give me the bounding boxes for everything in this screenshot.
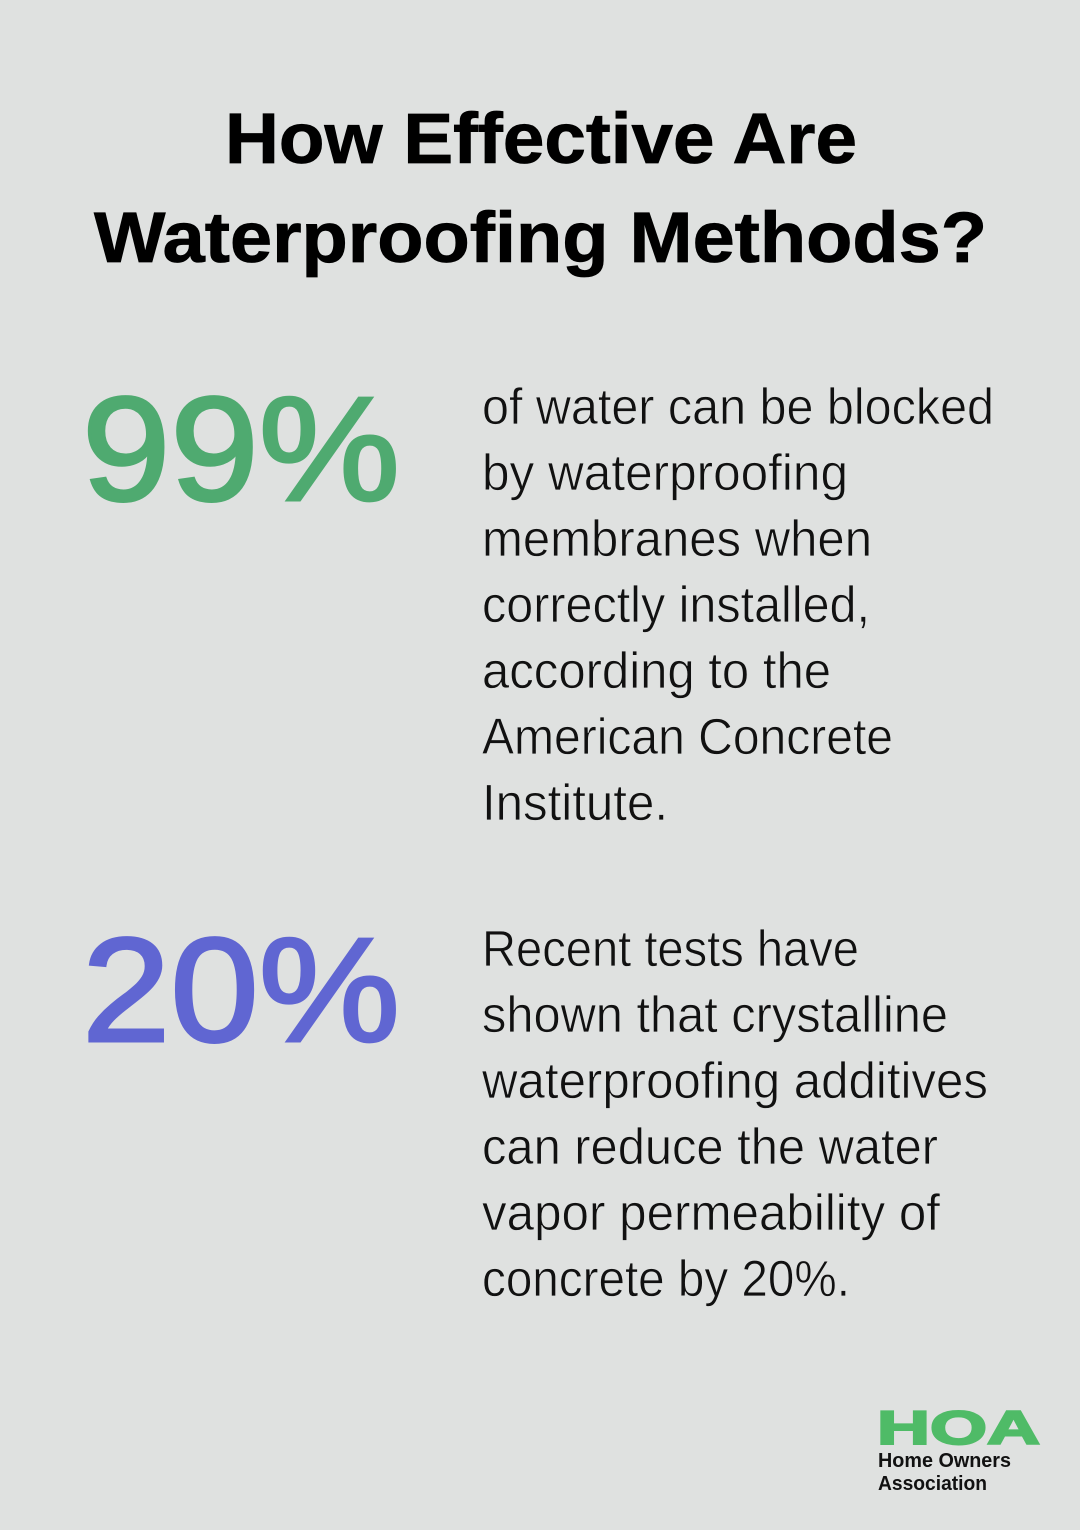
text block: 99% description: according to the bbox=[482, 642, 831, 699]
text block: 99% description bbox=[482, 378, 994, 831]
text block: 99% description: American Concrete bbox=[482, 708, 893, 765]
text block: 99% description: membranes when bbox=[482, 510, 872, 567]
text block: 99% description: of water can be blocked bbox=[482, 378, 994, 435]
text block: 20% description: Recent tests have bbox=[482, 920, 859, 977]
logo: Home Owners Association bbox=[877, 1401, 1040, 1495]
text block: 99% description: correctly installed, bbox=[482, 576, 870, 633]
text block: 20% description: waterproofing additives bbox=[481, 1052, 988, 1109]
title: How Effective Are bbox=[225, 100, 857, 179]
title bbox=[94, 100, 987, 278]
text block: 20% description: can reduce the water bbox=[482, 1118, 938, 1175]
title: Waterproofing Methods? bbox=[94, 199, 987, 278]
text block: 99% description: Institute. bbox=[482, 774, 668, 831]
logo: Home Owners Association: Association bbox=[878, 1473, 987, 1495]
stat: 99%: 99% bbox=[82, 367, 400, 532]
text block: 20% description: concrete by 20%. bbox=[482, 1250, 850, 1307]
logo: Home Owners Association: HOA bbox=[877, 1401, 1040, 1454]
text block: 20% description: vapor permeability of bbox=[482, 1184, 941, 1241]
text block: 20% description: shown that crystalline bbox=[482, 986, 948, 1043]
logo: Home Owners Association: Home Owners bbox=[878, 1450, 1011, 1472]
text block: 20% description bbox=[481, 920, 988, 1307]
text block: 99% description: by waterproofing bbox=[482, 444, 848, 501]
stat: 20%: 20% bbox=[82, 908, 400, 1073]
